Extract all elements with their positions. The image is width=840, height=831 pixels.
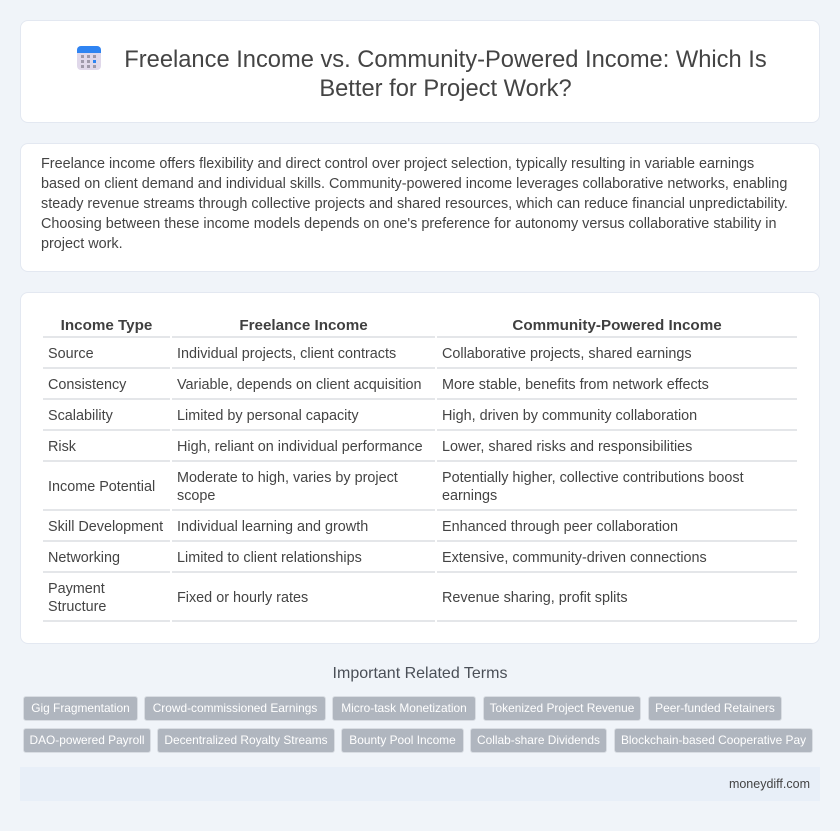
- tag: [470, 728, 607, 753]
- row: income potential: earnings: [442, 488, 497, 504]
- related terms heading: Important Related Terms: [333, 665, 507, 682]
- row: payment structure: Revenue sharing, profit splits: [442, 590, 628, 606]
- tag: [23, 728, 151, 753]
- icon: calendar: [77, 46, 101, 70]
- intro text: project work.: [41, 236, 123, 252]
- tag: Peer-funded Retainers: [655, 701, 775, 715]
- intro text: [41, 156, 788, 252]
- intro text: steady revenue streams through collective projects and shared resources, which can reduce financial unpredictability.: [41, 196, 788, 212]
- tag: [157, 728, 335, 753]
- tag: [341, 728, 464, 753]
- footer bar: [20, 767, 820, 801]
- intro text: based on client demand and individual skills. Community-powered income leverages collaborative networks, enabling: [41, 176, 787, 192]
- table headers: Income Type: [61, 317, 152, 334]
- tag: Micro-task Monetization: [341, 701, 467, 715]
- related terms tags: [23, 696, 813, 753]
- row: consistency: More stable, benefits from network effects: [442, 377, 709, 393]
- row: income potential: Moderate to high, varies by project: [177, 470, 398, 486]
- title: Better for Project Work?: [319, 76, 572, 102]
- row: scalability: Limited by personal capacity: [177, 408, 359, 424]
- intro text: Choosing between these income models depends on one's preference for autonomy versus collaborative stability in: [41, 216, 776, 232]
- row: source: Source: [48, 346, 94, 362]
- header panel: [20, 20, 820, 123]
- row: income potential: scope: [177, 488, 215, 504]
- row: payment structure: Structure: [48, 599, 106, 615]
- row: risk: [48, 439, 692, 455]
- tag: [614, 728, 813, 753]
- row: consistency: [48, 377, 709, 393]
- tag: DAO-powered Payroll: [30, 733, 144, 747]
- panel: comparison table: [20, 292, 820, 644]
- row: payment structure: [48, 581, 628, 615]
- row: networking: Extensive, community-driven connections: [442, 550, 707, 566]
- row: networking: Limited to client relationships: [177, 550, 362, 566]
- tag: Collab-share Dividends: [477, 733, 600, 747]
- row: risk: High, reliant on individual performance: [177, 439, 423, 455]
- row: source: Collaborative projects, shared earnings: [442, 346, 692, 362]
- row: risk: Risk: [48, 439, 76, 455]
- row: income potential: [48, 470, 744, 504]
- row: income potential: Potentially higher, collective contributions boost: [442, 470, 744, 486]
- tag: Blockchain-based Cooperative Pay: [621, 733, 806, 747]
- row: scalability: [48, 408, 697, 424]
- row: scalability: High, driven by community collaboration: [442, 408, 697, 424]
- tag: [144, 696, 326, 721]
- table headers: Freelance Income: [239, 317, 368, 334]
- row: consistency: Variable, depends on client acquisition: [177, 377, 422, 393]
- row: skill development: Individual learning and growth: [177, 519, 368, 535]
- tag: Bounty Pool Income: [349, 733, 456, 747]
- footer source: moneydiff.com: [729, 777, 810, 791]
- row: payment structure: Payment: [48, 581, 105, 597]
- tag: [332, 696, 476, 721]
- row: source: Individual projects, client contracts: [177, 346, 396, 362]
- row: consistency: Consistency: [48, 377, 126, 393]
- intro panel: [20, 143, 820, 272]
- tag: [23, 696, 138, 721]
- row: payment structure: Fixed or hourly rates: [177, 590, 308, 606]
- row: skill development: Skill Development: [48, 519, 163, 535]
- intro text: Freelance income offers flexibility and direct control over project selection, typically resulting in variable earnings: [41, 156, 754, 172]
- tag: Crowd-commissioned Earnings: [153, 701, 317, 715]
- row: networking: [48, 550, 707, 566]
- table headers: [61, 317, 722, 334]
- title: Freelance Income vs. Community-Powered Income: Which Is: [124, 47, 767, 73]
- row: risk: Lower, shared risks and responsibilities: [442, 439, 692, 455]
- tag: Tokenized Project Revenue: [490, 701, 634, 715]
- tag: [648, 696, 782, 721]
- tag: Gig Fragmentation: [31, 701, 130, 715]
- row: skill development: [48, 519, 678, 535]
- tag: [483, 696, 641, 721]
- tag: Decentralized Royalty Streams: [164, 733, 328, 747]
- table headers: Community-Powered Income: [512, 317, 722, 334]
- row: scalability: Scalability: [48, 408, 113, 424]
- row: networking: Networking: [48, 550, 120, 566]
- row: income potential: Income Potential: [48, 479, 155, 495]
- title: [124, 47, 767, 102]
- row: source: [48, 346, 692, 362]
- row: skill development: Enhanced through peer collaboration: [442, 519, 678, 535]
